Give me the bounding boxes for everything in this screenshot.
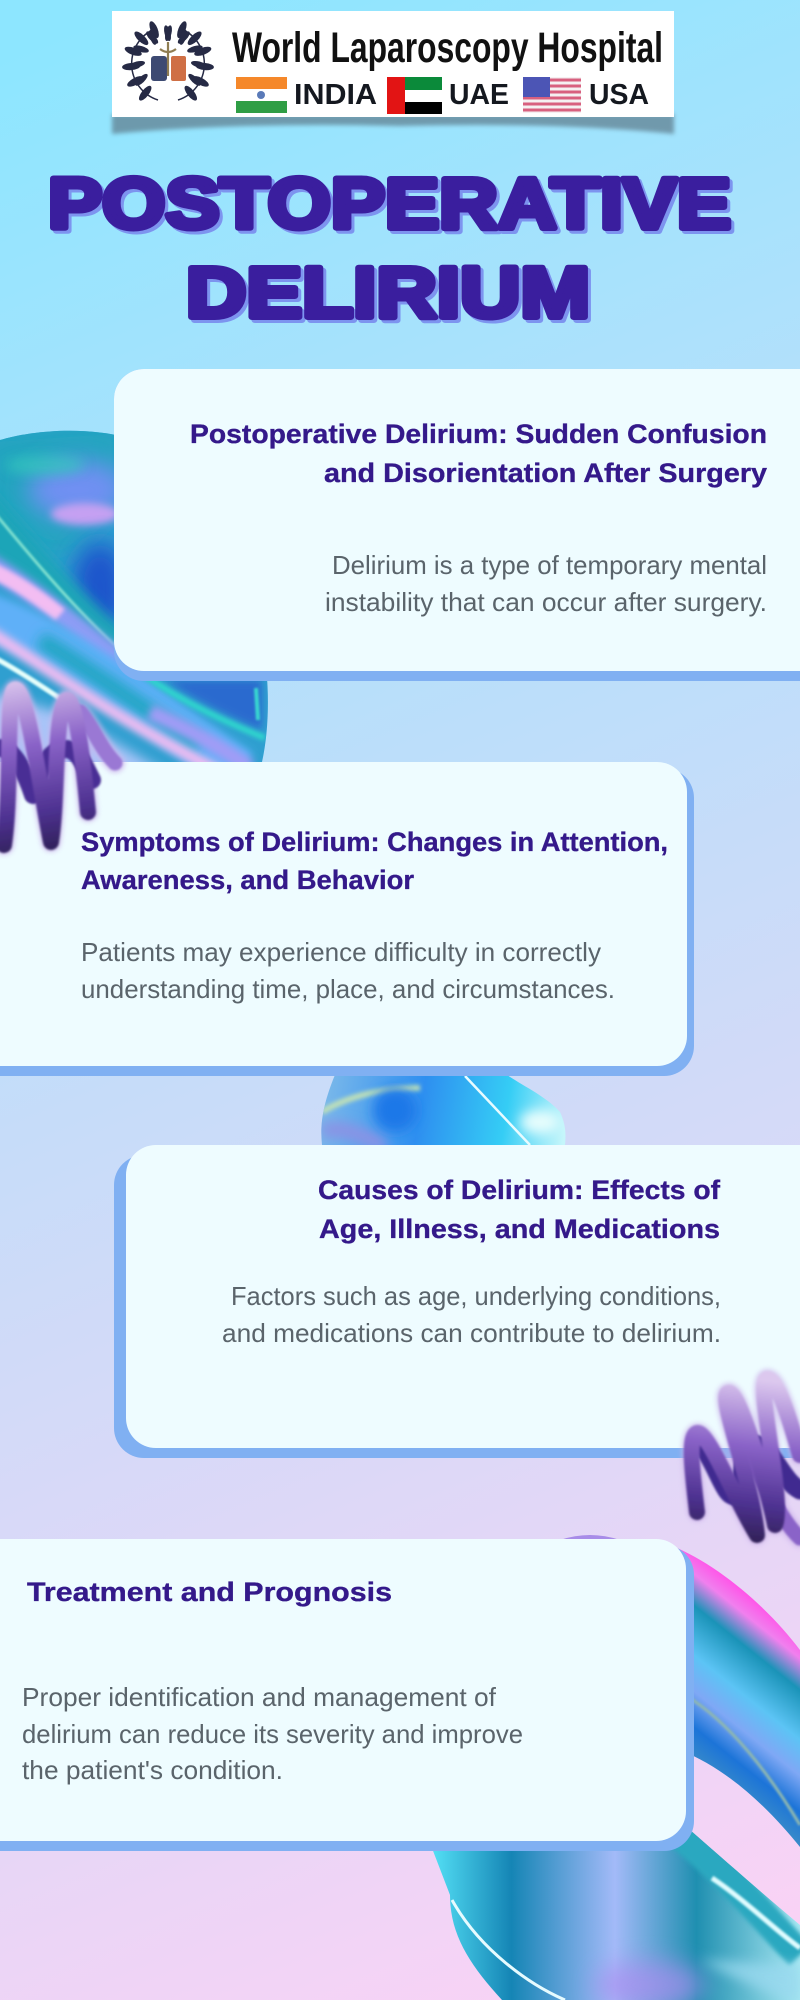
- body text line 2: instability that can occur after surgery.: [325, 587, 767, 617]
- dark area below first panel: [165, 680, 262, 730]
- heading line 2: Age, Illness, and Medications: [319, 1214, 720, 1244]
- body text: Patients may experience difficulty in correctly: [81, 937, 601, 967]
- title: POSTOPERATIVE: [51, 168, 734, 247]
- body text: Delirium is a type of temporary mental: [332, 550, 767, 580]
- flag: UAE: [387, 77, 442, 114]
- logo banner: [112, 11, 674, 134]
- flag: India: [236, 77, 287, 113]
- icon: laurel wreath emblem: [122, 20, 214, 102]
- body text line 3: the patient's condition.: [22, 1755, 283, 1785]
- diagonal streak bands: [0, 495, 240, 772]
- heading: treatment: Treatment and Prognosis: [27, 1577, 392, 1607]
- panel: causes: [114, 1145, 800, 1458]
- label: UAE: UAE: [449, 79, 509, 111]
- decorative iridescent blob: middle: [321, 1076, 566, 1145]
- decorative spring: right: [692, 1379, 800, 1538]
- title: [48, 165, 734, 336]
- body text line 2: understanding time, place, and circumstances.: [81, 974, 615, 1004]
- decorative spring: upper left: [0, 689, 115, 845]
- title: DELIRIUM: [189, 257, 593, 336]
- heading line 2: and Disorientation After Surgery: [324, 458, 767, 488]
- body text: Factors such as age, underlying conditions,: [231, 1281, 721, 1311]
- body text: Proper identification and management of: [22, 1682, 497, 1712]
- flag: USA: [523, 77, 581, 113]
- panel: treatment: [0, 1539, 694, 1851]
- decorative iridescent blob: left: [0, 430, 268, 762]
- title: POSTOPERATIVE: [48, 165, 731, 244]
- body text line 2: and medications can contribute to delirium.: [222, 1318, 721, 1348]
- upper teal and violet sheen: [0, 430, 114, 628]
- heading: definition: Postoperative Delirium: Sudden Confusion: [190, 419, 767, 449]
- body text line 2: delirium can reduce its severity and improve: [22, 1719, 523, 1749]
- logo name: World Laparoscopy Hospital: [232, 24, 663, 72]
- heading: symptoms: Symptoms of Delirium: Changes in Attention,: [81, 827, 668, 857]
- panel: symptoms: [0, 762, 694, 1076]
- decorative iridescent blob: bottom ribbon: [425, 1530, 800, 2000]
- title: DELIRIUM: [186, 254, 590, 333]
- label: USA: USA: [589, 79, 649, 111]
- panel: definition: [114, 369, 800, 681]
- heading: causes: Causes of Delirium: Effects of: [318, 1175, 721, 1205]
- heading line 2: Awareness, and Behavior: [81, 865, 414, 895]
- label: India: INDIA: [294, 79, 377, 111]
